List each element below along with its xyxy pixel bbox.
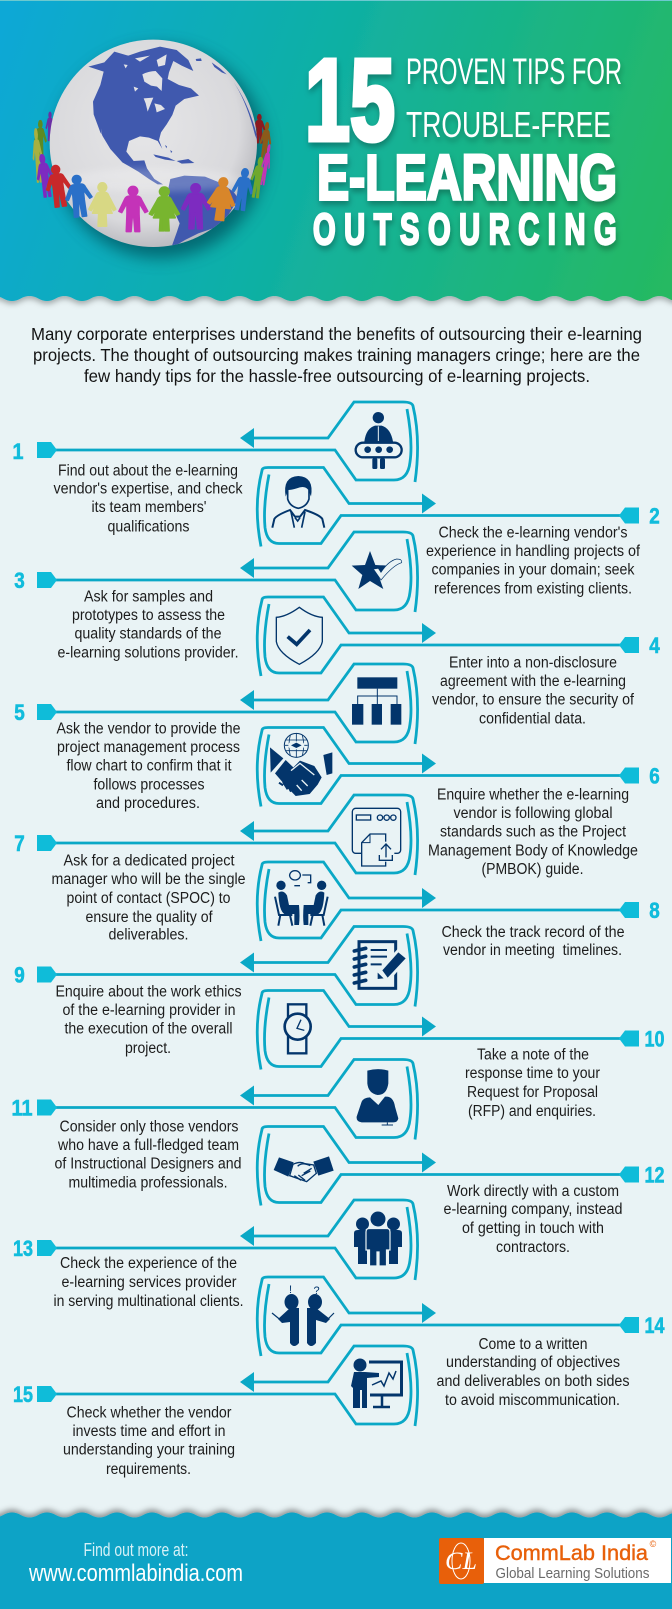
number: 5 <box>14 700 25 725</box>
tip text: requirements. <box>106 1461 191 1478</box>
CommLab India logo: © <box>650 1539 657 1549</box>
number: 6 <box>649 764 660 788</box>
header banner <box>0 0 672 301</box>
icon: shield with check <box>276 607 322 664</box>
tip text: Request for Proposal <box>467 1084 598 1101</box>
icon: global handshake <box>270 733 332 796</box>
tip text: Work directly with a custom <box>447 1183 619 1200</box>
back row of people <box>31 112 273 182</box>
number: 12 <box>644 1162 664 1188</box>
intro paragraph: projects. The thought of outsourcing makes training managers cringe; here are the <box>33 345 640 365</box>
tip text: e-learning solutions provider. <box>58 644 238 662</box>
title: OUTSOURCING <box>313 204 617 253</box>
connector panel <box>37 1346 418 1426</box>
tip text: vendor, to ensure the security of <box>432 692 635 708</box>
tip text: vendor in meeting timelines. <box>443 942 622 959</box>
tip text: Check the experience of the <box>60 1255 237 1272</box>
connector panel <box>257 597 639 676</box>
icon: businessman outline <box>272 476 324 528</box>
number: 3 <box>14 568 25 593</box>
connector panel <box>37 795 418 875</box>
tip 13 <box>13 1200 418 1310</box>
tip text: response time to your <box>465 1065 600 1082</box>
intro paragraph: few handy tips for the hassle-free outsourcing of e-learning projects. <box>84 366 590 386</box>
number: 9 <box>14 962 25 988</box>
tip text: Come to a written <box>478 1336 588 1353</box>
tip 12 <box>257 1126 664 1256</box>
intro paragraph: Many corporate enterprises understand the benefits of outsourcing their e-learning <box>31 324 642 344</box>
icon: two people questioning <box>272 1284 334 1346</box>
tip text: (PMBOK) guide. <box>482 861 584 878</box>
icon: wristwatch <box>285 1004 311 1053</box>
connector panel <box>257 468 639 546</box>
tip 9 <box>14 926 418 1057</box>
connector panel <box>37 402 418 482</box>
tip text <box>56 720 240 812</box>
number: 11 <box>12 1096 32 1120</box>
tip text: Enquire about the work ethics <box>56 984 242 1000</box>
tip 3 <box>14 532 418 662</box>
icon: person on conveyor <box>356 412 402 469</box>
tip 4 <box>257 597 660 728</box>
footer call to action <box>28 1540 243 1587</box>
tip text: project. <box>125 1040 171 1057</box>
tip 10 <box>257 990 664 1120</box>
tip text: and procedures. <box>96 795 200 812</box>
tip text: understanding your training <box>63 1442 235 1458</box>
tip text: ensure the quality of <box>86 909 213 926</box>
footer call to action: Find out more at: <box>84 1540 188 1560</box>
tip text: Check the e-learning vendor's <box>438 524 628 542</box>
tip text <box>54 462 243 536</box>
tip text: vendor is following global <box>454 805 612 822</box>
tip text: companies in your domain; seek <box>432 562 635 578</box>
number: 7 <box>14 831 25 856</box>
tip text: confidential data. <box>479 710 586 728</box>
tip text <box>436 1336 630 1409</box>
tip 2 <box>257 468 660 598</box>
intro paragraph <box>31 324 642 386</box>
icon: team of three <box>354 1212 402 1266</box>
number: 1 <box>12 439 24 464</box>
number: 10 <box>644 1026 664 1052</box>
tip text: vendor's expertise, and check <box>54 480 243 498</box>
land masses <box>88 47 259 248</box>
tip text <box>442 924 624 959</box>
tip 1 <box>12 402 418 536</box>
connector panel <box>257 990 639 1070</box>
CommLab India logo: Global Learning Solutions <box>496 1565 650 1582</box>
tip text: Enquire whether the e-learning <box>437 786 629 804</box>
tip text: Consider only those vendors <box>60 1118 239 1136</box>
CommLab India logo: CL <box>445 1548 477 1575</box>
tip text: references from existing clients. <box>434 580 632 598</box>
icon: browser window and document upload <box>352 808 401 866</box>
tip text: prototypes to assess the <box>72 607 225 624</box>
CommLab India logo <box>439 1538 671 1584</box>
tip text: point of contact (SPOC) to <box>66 890 230 907</box>
tip text: Ask the vendor to provide the <box>56 720 240 738</box>
globe with ring of people <box>31 40 273 258</box>
glow behind people <box>63 168 243 192</box>
icon: org chart <box>352 677 401 725</box>
number: 2 <box>649 504 660 528</box>
tip text: quality standards of the <box>74 626 222 642</box>
number: 15 <box>13 1382 33 1407</box>
tip text: deliverables. <box>108 926 188 944</box>
tip text <box>63 1404 235 1478</box>
icon: handshake <box>274 1156 334 1182</box>
tip text: Enter into a non-disclosure <box>449 654 617 672</box>
tip text: agreement with the e-learning <box>440 673 626 690</box>
connector panel <box>257 1126 639 1206</box>
tip text: and deliverables on both sides <box>436 1373 630 1390</box>
tip text: project management process <box>57 739 240 756</box>
icon: star with check <box>352 551 402 589</box>
number: 13 <box>13 1236 33 1261</box>
tip 7 <box>14 795 418 944</box>
icon: two people meeting <box>275 871 328 926</box>
tip text <box>56 984 242 1057</box>
tip 6 <box>257 728 660 878</box>
tip text: of getting in touch with <box>462 1220 604 1237</box>
icon: professional at desk <box>357 1069 398 1125</box>
tip text: the execution of the overall <box>64 1020 232 1038</box>
footer band <box>0 1512 672 1609</box>
tip text <box>54 1255 244 1310</box>
tip text: e-learning services provider <box>62 1274 236 1291</box>
connector panel <box>37 926 418 1006</box>
tip text: Take a note of the <box>477 1046 589 1064</box>
number: 14 <box>644 1313 665 1338</box>
tip 15 <box>13 1346 418 1478</box>
tip text: Find out about the e-learning <box>58 462 238 480</box>
tip 11 <box>12 1060 418 1192</box>
tip text: e-learning company, instead <box>444 1201 622 1218</box>
tip text <box>465 1046 600 1120</box>
tip text: of Instructional Designers and <box>54 1156 242 1172</box>
tip text <box>58 588 238 662</box>
tip text: Check whether the vendor <box>66 1404 232 1422</box>
icon: two people questioning: ? <box>313 1285 320 1297</box>
tip text: understanding of objectives <box>446 1354 620 1371</box>
icon: presenter with chart board <box>351 1358 402 1408</box>
tip text: of the e-learning provider in <box>62 1002 236 1019</box>
tip text: experience in handling projects of <box>426 543 641 560</box>
number: 8 <box>649 898 660 923</box>
tip text: Ask for a dedicated project <box>64 852 235 870</box>
icon: two people questioning: ! <box>289 1284 292 1296</box>
connector panel <box>37 664 418 744</box>
tip text <box>426 524 641 598</box>
tip text <box>432 654 635 728</box>
tip text: standards such as the Project <box>440 824 627 840</box>
tip text: Check the track record of the <box>442 924 624 941</box>
tip text <box>428 786 638 878</box>
tip 14 <box>257 1277 665 1409</box>
connector panel <box>37 1060 418 1140</box>
tip text: who have a full-fledged team <box>57 1137 239 1154</box>
tip text <box>54 1118 242 1192</box>
tip text: follows processes <box>94 776 205 794</box>
tip text: Management Body of Knowledge <box>428 842 638 860</box>
connector panel <box>37 1200 418 1280</box>
lakes and bays <box>101 54 167 150</box>
title: 15 <box>305 35 395 165</box>
tip text: multimedia professionals. <box>68 1174 228 1192</box>
title <box>305 35 622 253</box>
tip text <box>52 852 246 944</box>
tip text: in serving multinational clients. <box>54 1293 244 1310</box>
tip text: manager who will be the single <box>52 871 246 888</box>
connector panel <box>257 1277 639 1356</box>
connector panel <box>257 728 639 806</box>
tip text: Ask for samples and <box>84 588 213 606</box>
tip text: invests time and effort in <box>72 1423 226 1440</box>
tip text: contractors. <box>496 1239 570 1256</box>
number: 4 <box>649 633 660 658</box>
tip text: qualifications <box>108 518 190 536</box>
tip text <box>444 1183 622 1256</box>
tip text: flow chart to confirm that it <box>66 758 232 774</box>
CommLab India logo: CommLab India <box>495 1542 648 1565</box>
connector panel <box>37 532 418 612</box>
front row of people <box>34 144 273 232</box>
connector panel <box>257 862 639 941</box>
tip text: its team members' <box>92 499 207 516</box>
tip 8 <box>257 862 660 959</box>
icon: notepad and pencil <box>354 942 409 988</box>
tip 5 <box>14 664 418 812</box>
tip text: (RFP) and enquiries. <box>468 1103 596 1120</box>
footer call to action: www.commlabindia.com <box>28 1560 243 1587</box>
tip text: to avoid miscommunication. <box>445 1392 620 1409</box>
